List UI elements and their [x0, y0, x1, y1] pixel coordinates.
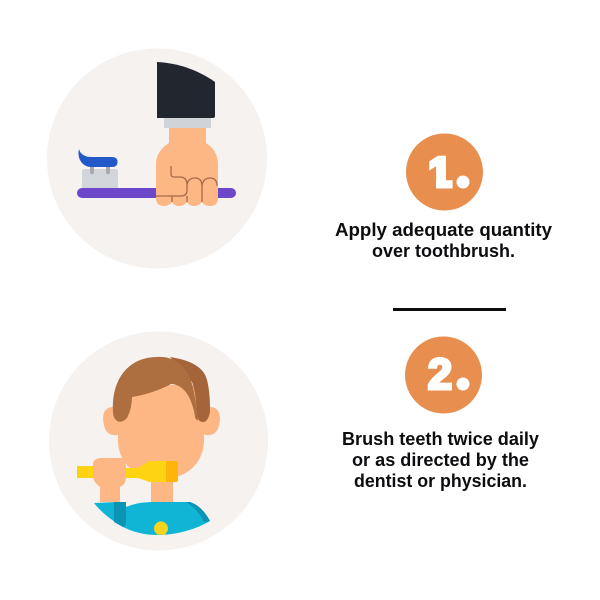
step 1 badge: 1	[428, 148, 452, 196]
step 1 text: Apply adequate quantity	[335, 219, 553, 240]
icon: toothbrush in hand	[77, 461, 178, 482]
icon: hand and arm	[93, 458, 126, 502]
icon: neck	[151, 470, 173, 506]
icon: toothbrush head	[82, 169, 118, 188]
icon: ears	[103, 407, 220, 435]
step 2 text: dentist or physician.	[354, 470, 527, 491]
divider	[393, 308, 506, 311]
icon: shirt shading	[114, 502, 210, 527]
icon: shirt cuff	[164, 118, 211, 128]
panel: toothbrush illustration	[47, 48, 267, 268]
icon: hair	[113, 357, 210, 422]
panel: person brushing illustration	[49, 332, 268, 550]
step 2 text	[342, 428, 540, 491]
step 1 badge	[406, 134, 483, 210]
icon: bristle marks	[90, 166, 110, 174]
step 2 text: or as directed by the	[352, 449, 529, 470]
step 2 badge	[405, 336, 482, 414]
step 2 text: Brush teeth twice daily	[342, 428, 540, 449]
icon: face	[118, 385, 204, 479]
step 1 text	[335, 219, 553, 261]
icon: fist	[156, 128, 218, 206]
step 2 badge: 2	[428, 350, 452, 399]
icon: shirt button	[154, 521, 168, 535]
icon: toothbrush handle	[77, 188, 236, 198]
step 1 text: over toothbrush.	[372, 240, 515, 261]
icon: suit sleeve	[157, 62, 215, 118]
icon: shirt	[94, 502, 210, 535]
icon: toothpaste	[78, 149, 118, 167]
